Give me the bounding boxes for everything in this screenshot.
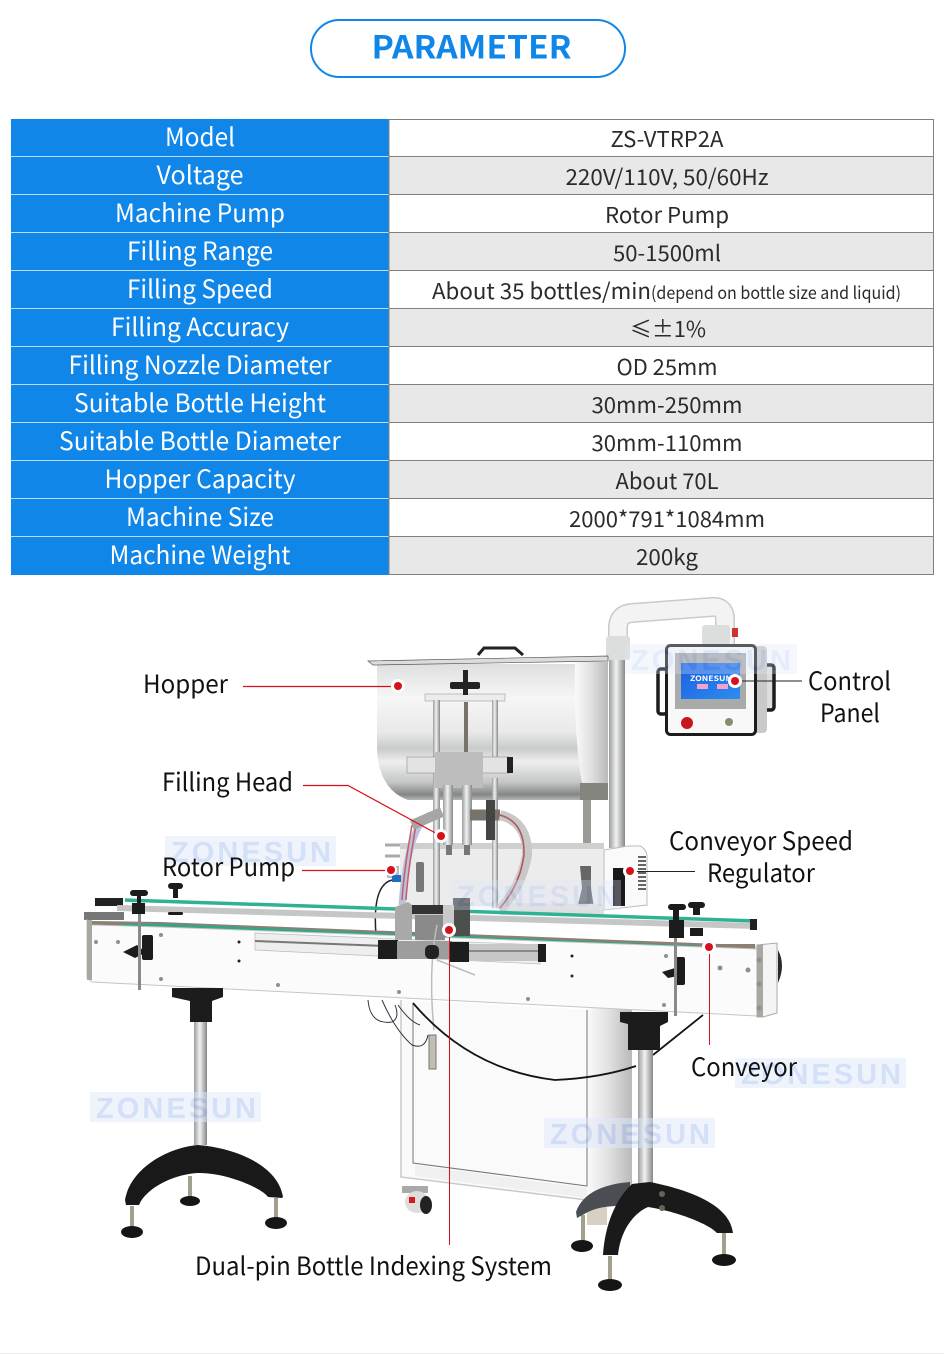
hopper — [368, 648, 608, 850]
row: Machine Pump — [115, 194, 729, 230]
watermarks — [90, 644, 906, 1151]
cabinet — [401, 1000, 632, 1205]
caster — [402, 1186, 432, 1214]
row: Machine Size — [126, 498, 765, 534]
callout: Filling Head: Filling Head — [162, 763, 293, 799]
callout: Control Panel — [728, 662, 891, 730]
watermark 2: ZONESUN — [96, 1093, 256, 1125]
pipe — [606, 607, 738, 660]
row: Machine Size: Machine Size — [126, 498, 274, 534]
row: Filling Speed — [127, 270, 901, 306]
row: Filling Speed: Filling Speed — [127, 270, 273, 306]
left leg — [121, 988, 287, 1238]
watermark 3: ZONESUN — [550, 1119, 710, 1151]
row: Machine Weight — [110, 536, 699, 572]
row: Voltage: 220V/110V, 50/60Hz — [566, 160, 768, 192]
conveyor hardware — [123, 883, 705, 985]
row: Filling Speed: About 35 bottles/min — [432, 274, 651, 306]
row: Machine Pump: Machine Pump — [115, 194, 285, 230]
right leg — [571, 1012, 736, 1291]
row: Model: Model — [165, 118, 235, 154]
row: Filling Nozzle Diameter: OD 25mm — [616, 350, 718, 382]
watermark 1: ZONESUN — [171, 837, 331, 869]
row: Voltage — [156, 156, 768, 192]
callout: Rotor Pump — [162, 848, 397, 884]
watermark 6: ZONESUN — [457, 881, 617, 913]
filling head — [375, 670, 527, 935]
callout: Conveyor: Conveyor — [691, 1048, 797, 1084]
row: Filling Nozzle Diameter: Filling Nozzle Diameter — [68, 346, 332, 382]
row: Model — [165, 118, 724, 154]
callouts — [143, 662, 891, 1283]
callout: Conveyor — [691, 940, 797, 1084]
row: Filling Accuracy: ≤±1% — [630, 312, 706, 344]
callout: Conveyor Speed Regulator — [623, 822, 853, 890]
cable — [413, 1003, 703, 1080]
conveyor bolts — [94, 933, 762, 1010]
callout: Conveyor Speed Regulator: Regulator — [707, 854, 815, 890]
conveyor — [84, 883, 782, 1030]
watermark 4: ZONESUN — [741, 1059, 901, 1091]
row: Filling Accuracy: Filling Accuracy — [111, 308, 289, 344]
row: Suitable Bottle Diameter — [59, 422, 742, 458]
callout: Control Panel: Control — [808, 662, 891, 698]
callout: Filling Head — [162, 763, 448, 843]
row: Suitable Bottle Height: 30mm-250mm — [592, 388, 742, 420]
row: Hopper Capacity — [104, 460, 719, 496]
row: Suitable Bottle Height — [74, 384, 742, 420]
callout: Rotor Pump: Rotor Pump — [162, 848, 295, 884]
row: Machine Size: 2000*791*1084mm — [569, 502, 765, 534]
callout: Conveyor Speed Regulator: Conveyor Speed — [669, 822, 853, 858]
watermark 5: ZONESUN — [631, 645, 791, 677]
row: Voltage: Voltage — [156, 156, 244, 192]
row: Filling Range: Filling Range — [127, 232, 273, 268]
machine illustration — [84, 607, 782, 1291]
row: Filling Range — [127, 232, 721, 268]
title: PARAMETER — [311, 20, 625, 77]
row: Filling Speed: (depend on bottle size and liquid) — [651, 279, 901, 304]
row: Suitable Bottle Diameter: 30mm-110mm — [592, 426, 742, 458]
base box — [400, 843, 647, 915]
title: PARAMETER: PARAMETER — [372, 22, 572, 68]
row: Suitable Bottle Height: Suitable Bottle Height — [74, 384, 327, 420]
row: Machine Pump: Rotor Pump — [605, 198, 729, 230]
row: Hopper Capacity: Hopper Capacity — [104, 460, 296, 496]
row: Model: ZS-VTRP2A — [610, 122, 724, 154]
row: Hopper Capacity: About 70L — [616, 464, 719, 496]
row: Machine Weight: Machine Weight — [110, 536, 291, 572]
wires under conveyor — [368, 1000, 428, 1046]
callout: Dual-pin Bottle Indexing System — [195, 923, 552, 1283]
row: Filling Nozzle Diameter — [68, 346, 718, 382]
parameter table — [11, 118, 934, 575]
support pillar — [609, 660, 625, 848]
row: Machine Weight: 200kg — [636, 540, 699, 572]
callout: Hopper: Hopper — [143, 665, 228, 701]
callout: Control Panel: Panel — [820, 694, 880, 730]
control panel — [658, 646, 774, 734]
callout: Hopper — [143, 665, 405, 701]
callout: Dual-pin Bottle Indexing System: Dual-pin Bottle Indexing System — [195, 1247, 552, 1283]
row: Filling Range: 50-1500ml — [613, 236, 721, 268]
control panel: ZONESUN — [690, 673, 732, 684]
row: Suitable Bottle Diameter: Suitable Bottle Diameter — [59, 422, 341, 458]
row: Filling Accuracy — [111, 308, 706, 344]
